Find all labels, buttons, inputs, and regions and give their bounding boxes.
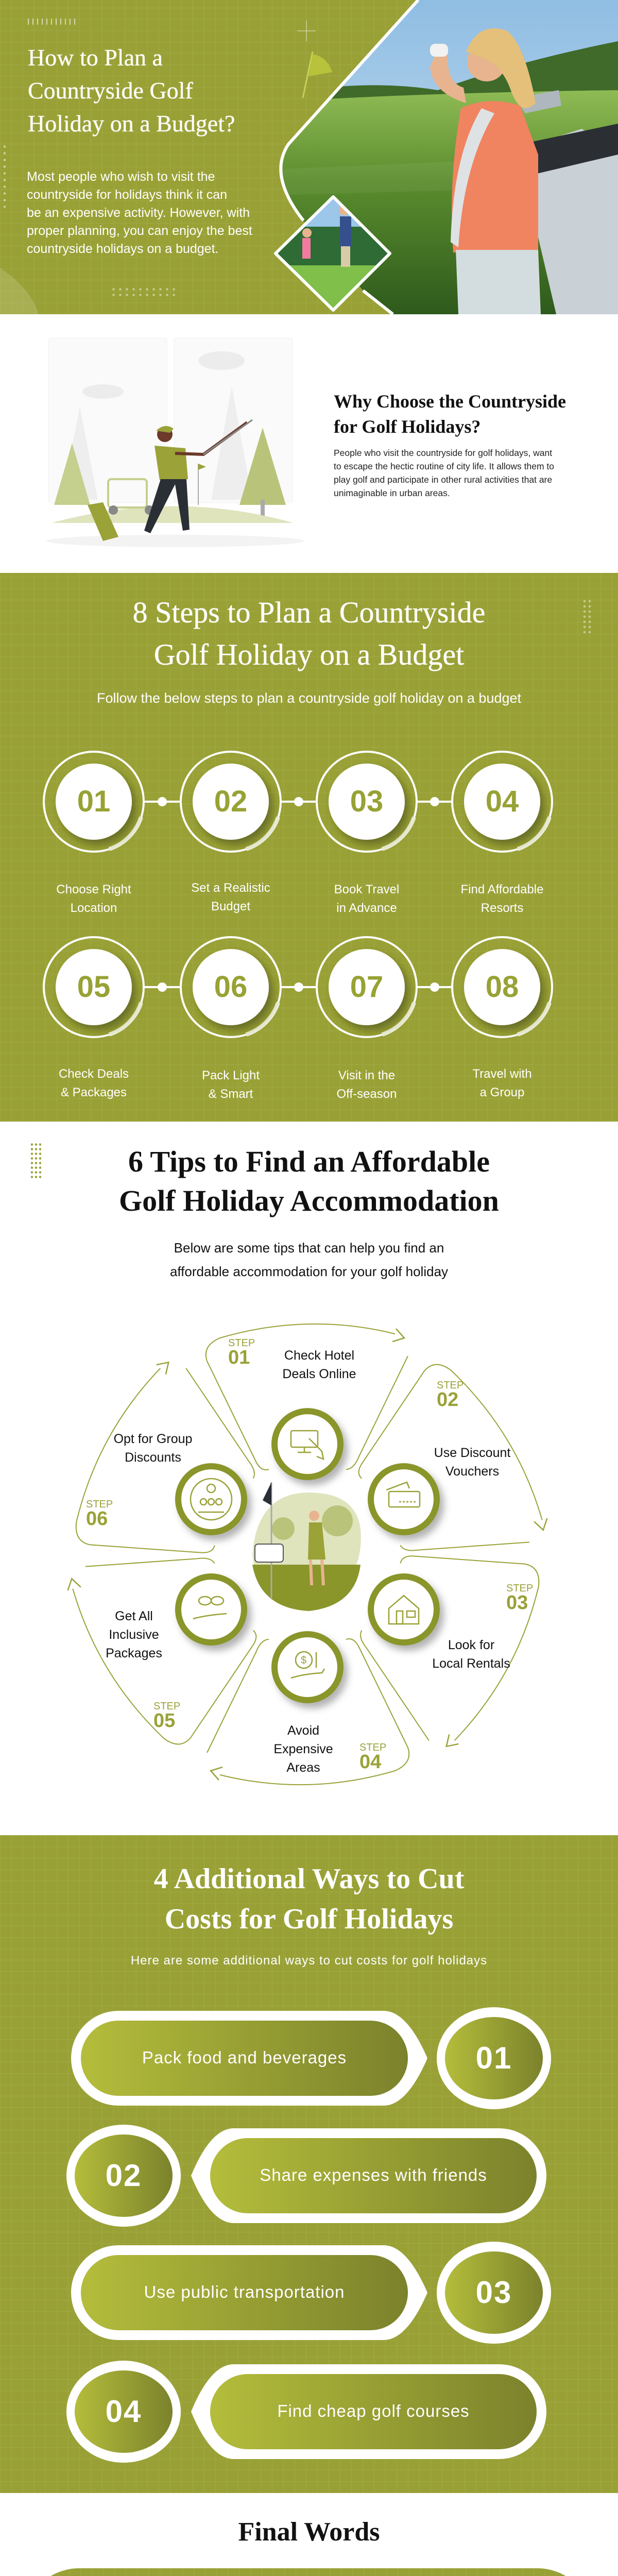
step 01: [56, 785, 131, 915]
step 05: Check Deals: [59, 1067, 129, 1081]
final words box: [24, 2568, 593, 2576]
icon: golf flag: [297, 21, 332, 98]
section: final words: [0, 2493, 618, 2576]
subtitle: Follow the below steps to plan a countryside golf holiday on a budget: [97, 690, 521, 706]
tip 05: STEP: [153, 1701, 180, 1712]
decorative tick marks: [28, 19, 77, 25]
step 04: Find Affordable: [460, 883, 544, 896]
section: 6 tips: Local Rentals: [432, 1656, 510, 1671]
heading: final words: Final Words: [238, 2517, 380, 2547]
section: 6 tips: Deals Online: [282, 1367, 356, 1381]
steps circles: [43, 751, 553, 1038]
heading: 4 ways: 4 Additional Ways to Cut: [154, 1863, 464, 1895]
way 03: Use public transportation: [144, 2282, 345, 2301]
tip 05: 05: [153, 1710, 175, 1732]
step 04: Resorts: [481, 901, 523, 915]
section: 6 tips: Areas: [286, 1760, 320, 1775]
heading: why choose: for Golf Holidays?: [334, 416, 480, 437]
step 05: & Packages: [61, 1086, 127, 1099]
step 06: & Smart: [209, 1087, 253, 1101]
section: 6 tips: Packages: [106, 1646, 162, 1660]
section: why choose countryside: [0, 314, 618, 573]
step 08: Travel with: [472, 1067, 532, 1081]
tip 06: STEP: [86, 1499, 113, 1510]
paragraph: why choose: unimaginable in urban areas.: [334, 488, 450, 498]
diamond photo: [273, 196, 391, 317]
section: 6 tips: Look for: [448, 1638, 494, 1652]
step 04: 04: [486, 785, 519, 818]
tip 04: STEP: [359, 1742, 386, 1753]
subtitle: [170, 1240, 448, 1279]
icon: house rent: [389, 1596, 419, 1624]
hero title: Countryside Golf: [28, 77, 193, 104]
way 02: Share expenses with friends: [260, 2165, 487, 2184]
step 06: [202, 970, 260, 1101]
icon: dollar hand: [291, 1652, 324, 1678]
section: 6 tips: Use Discount: [434, 1446, 510, 1460]
tip 02: 02: [437, 1389, 458, 1411]
section: 6 tips: Check Hotel: [284, 1348, 354, 1363]
step 01: Location: [71, 901, 117, 915]
step 01: Choose Right: [56, 883, 131, 896]
section: 6 tips: Vouchers: [445, 1464, 499, 1479]
tip 06: [86, 1499, 113, 1530]
step 03: in Advance: [336, 901, 397, 915]
tip 03: STEP: [506, 1583, 533, 1594]
center illustration: [252, 1482, 361, 1611]
hero intro text: countryside holidays on a budget.: [27, 242, 218, 256]
subtitle: affordable accommodation for your golf holiday: [170, 1264, 448, 1279]
icon: voucher: [386, 1482, 420, 1507]
paragraph: why choose: [334, 448, 554, 498]
step 07: Off-season: [337, 1087, 397, 1101]
step 02: [191, 785, 270, 913]
step 03: 03: [350, 785, 383, 818]
heading: 8 steps: [133, 596, 485, 672]
step 07: 07: [350, 970, 383, 1004]
section: 6 tips: Discounts: [125, 1450, 181, 1465]
step 07: [337, 970, 397, 1101]
paragraph: why choose: People who visit the countryside for golf holidays, want: [334, 448, 552, 458]
icon: infinity hand: [193, 1597, 227, 1619]
step 01: 01: [77, 785, 110, 818]
step 04: [460, 785, 544, 915]
heading: why choose: Why Choose the Countryside: [334, 391, 566, 412]
tip 02: [437, 1380, 464, 1411]
step 05: [59, 970, 129, 1099]
heading: 6 tips: [119, 1145, 499, 1217]
section: 6 tips: Get All: [115, 1609, 153, 1623]
paragraph: why choose: to escape the hectic routine of city life. It allows them to: [334, 461, 554, 471]
tip 04: [359, 1742, 386, 1773]
hero title: Holiday on a Budget?: [28, 110, 235, 137]
step 08: 08: [486, 970, 519, 1004]
hero intro text: countryside for holidays think it can: [27, 188, 227, 202]
step 02: 02: [214, 785, 247, 818]
heading: 6 tips: Golf Holiday Accommodation: [119, 1184, 499, 1217]
hero intro text: be an expensive activity. However, with: [27, 206, 250, 220]
hero intro text: Most people who wish to visit the: [27, 170, 215, 184]
step 08: [472, 970, 532, 1099]
hero title: [28, 44, 235, 137]
section: 6 tips: Opt for Group: [114, 1432, 192, 1446]
section: 6 tips: Avoid: [287, 1723, 319, 1738]
section: 4 additional ways: 04: [106, 2394, 142, 2429]
section: 4 additional ways: 01: [476, 2041, 512, 2075]
hero section: [0, 0, 618, 314]
hero photo: [0, 0, 618, 314]
icon: monitor: [291, 1431, 323, 1459]
heading: why choose: [334, 391, 566, 437]
hero intro text: proper planning, you can enjoy the best: [27, 224, 252, 238]
subtitle: Here are some additional ways to cut costs for golf holidays: [131, 1954, 487, 1968]
tip 02: STEP: [437, 1380, 464, 1391]
way 01: Pack food and beverages: [142, 2048, 347, 2067]
section: 4 additional ways: 03: [476, 2275, 512, 2310]
step 07: Visit in the: [338, 1069, 395, 1082]
tip 06: 06: [86, 1508, 108, 1530]
heading: 8 steps: 8 Steps to Plan a Countryside: [133, 596, 485, 629]
pills: [66, 2007, 551, 2463]
wheel diagram: [67, 1323, 548, 1786]
tip 04: 04: [359, 1751, 381, 1773]
tip 05: [153, 1701, 180, 1732]
step 02: Budget: [211, 900, 250, 913]
step 03: Book Travel: [334, 883, 399, 896]
icon: group: [191, 1479, 232, 1520]
tip 03: 03: [506, 1592, 528, 1614]
tip 01: [228, 1337, 255, 1368]
illustration: golfer: [46, 338, 304, 547]
section: 4 additional ways: 02: [106, 2158, 142, 2193]
section: 4 additional ways: [0, 1835, 618, 2493]
way 04: Find cheap golf courses: [277, 2401, 470, 2420]
heading: 4 ways: Costs for Golf Holidays: [165, 1903, 453, 1935]
paragraph: why choose: play golf and participate in other rural activities that are: [334, 474, 552, 485]
tip 03: [506, 1583, 533, 1614]
section: 8 steps: [0, 573, 618, 1122]
section: 6 tips: Inclusive: [109, 1628, 159, 1642]
heading: 6 tips: 6 Tips to Find an Affordable: [128, 1145, 490, 1178]
step 08: a Group: [480, 1086, 524, 1099]
tip 01: 01: [228, 1347, 250, 1368]
heading: 8 steps: Golf Holiday on a Budget: [154, 638, 464, 671]
section: 6 tips: Expensive: [273, 1742, 333, 1756]
hero title: How to Plan a: [28, 44, 163, 71]
step 05: 05: [77, 970, 110, 1004]
tip 01: STEP: [228, 1337, 255, 1349]
heading: 4 ways: [154, 1863, 465, 1935]
step 06: 06: [214, 970, 247, 1004]
subtitle: Below are some tips that can help you find an: [174, 1240, 444, 1256]
step 06: Pack Light: [202, 1069, 260, 1082]
step 02: Set a Realistic: [191, 881, 270, 895]
hero intro text: [27, 170, 252, 256]
wheel diagram: $: [301, 1655, 306, 1666]
section: 6 tips: [0, 1122, 618, 1835]
step 03: [334, 785, 399, 915]
